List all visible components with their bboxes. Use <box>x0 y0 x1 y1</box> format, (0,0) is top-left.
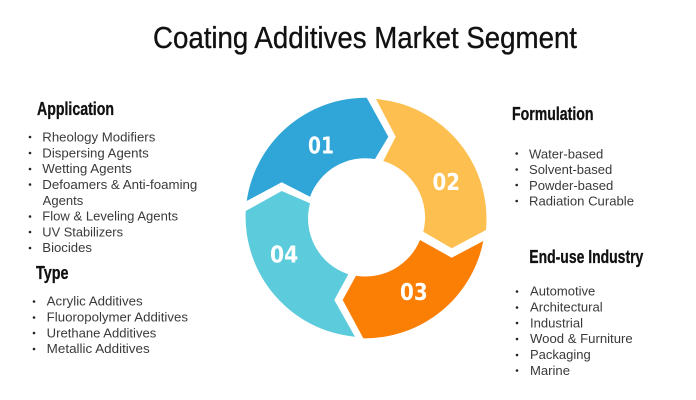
heading: type: Type <box>36 262 68 283</box>
list: application items: UV Stabilizers <box>42 225 123 239</box>
list: formulation items: Radiation Curable <box>529 195 634 209</box>
list: end-use items: Industrial <box>530 316 583 330</box>
list: formulation items: Water-based <box>529 147 603 161</box>
list: end-use items <box>516 285 633 378</box>
segment 02: 02 <box>432 170 460 196</box>
list: application items: Dispersing Agents <box>42 146 149 160</box>
list: type items: Acrylic Additives <box>47 295 143 309</box>
list: application items: Agents <box>43 194 83 208</box>
list: type items: Urethane Additives <box>47 326 156 340</box>
heading: application: Application <box>37 98 114 119</box>
list: type items <box>33 295 188 356</box>
list: end-use items: Automotive <box>530 285 595 299</box>
heading: formulation: Formulation <box>512 103 594 124</box>
list: formulation items <box>515 147 634 209</box>
list: type items: Metallic Additives <box>47 342 150 356</box>
segment 04 <box>246 191 355 337</box>
chart: circular arrow ring <box>246 98 486 338</box>
segment 04: 04 <box>270 242 298 268</box>
segment 02 <box>376 99 486 248</box>
segment 01: 01 <box>308 133 334 159</box>
list: end-use items: Marine <box>530 364 570 378</box>
list: end-use items: Architectural <box>530 300 603 314</box>
segment 03 <box>343 240 483 338</box>
list: application items: Defoamers & Anti-foaming <box>42 178 197 192</box>
heading: end-use industry: End-use Industry <box>529 246 644 267</box>
list: end-use items: Packaging <box>530 348 591 362</box>
panel: type <box>33 262 188 356</box>
panel: application <box>29 98 197 255</box>
list: application items: Wetting Agents <box>42 162 132 176</box>
list: formulation items: Powder-based <box>529 179 613 193</box>
list: application items: Rheology Modifiers <box>42 130 155 144</box>
list: type items: Fluoropolymer Additives <box>47 310 188 324</box>
panel: end-use industry <box>516 246 644 378</box>
list: application items <box>29 130 197 255</box>
list: end-use items: Wood & Furniture <box>530 332 633 346</box>
list: application items: Biocides <box>42 241 92 255</box>
segment 03: 03 <box>400 280 428 306</box>
list: application items: Flow & Leveling Agents <box>42 210 178 224</box>
title: Coating Additives Market Segment <box>153 20 577 55</box>
list: formulation items: Solvent-based <box>529 163 612 177</box>
panel: formulation <box>512 103 634 209</box>
segment 01 <box>247 98 388 201</box>
